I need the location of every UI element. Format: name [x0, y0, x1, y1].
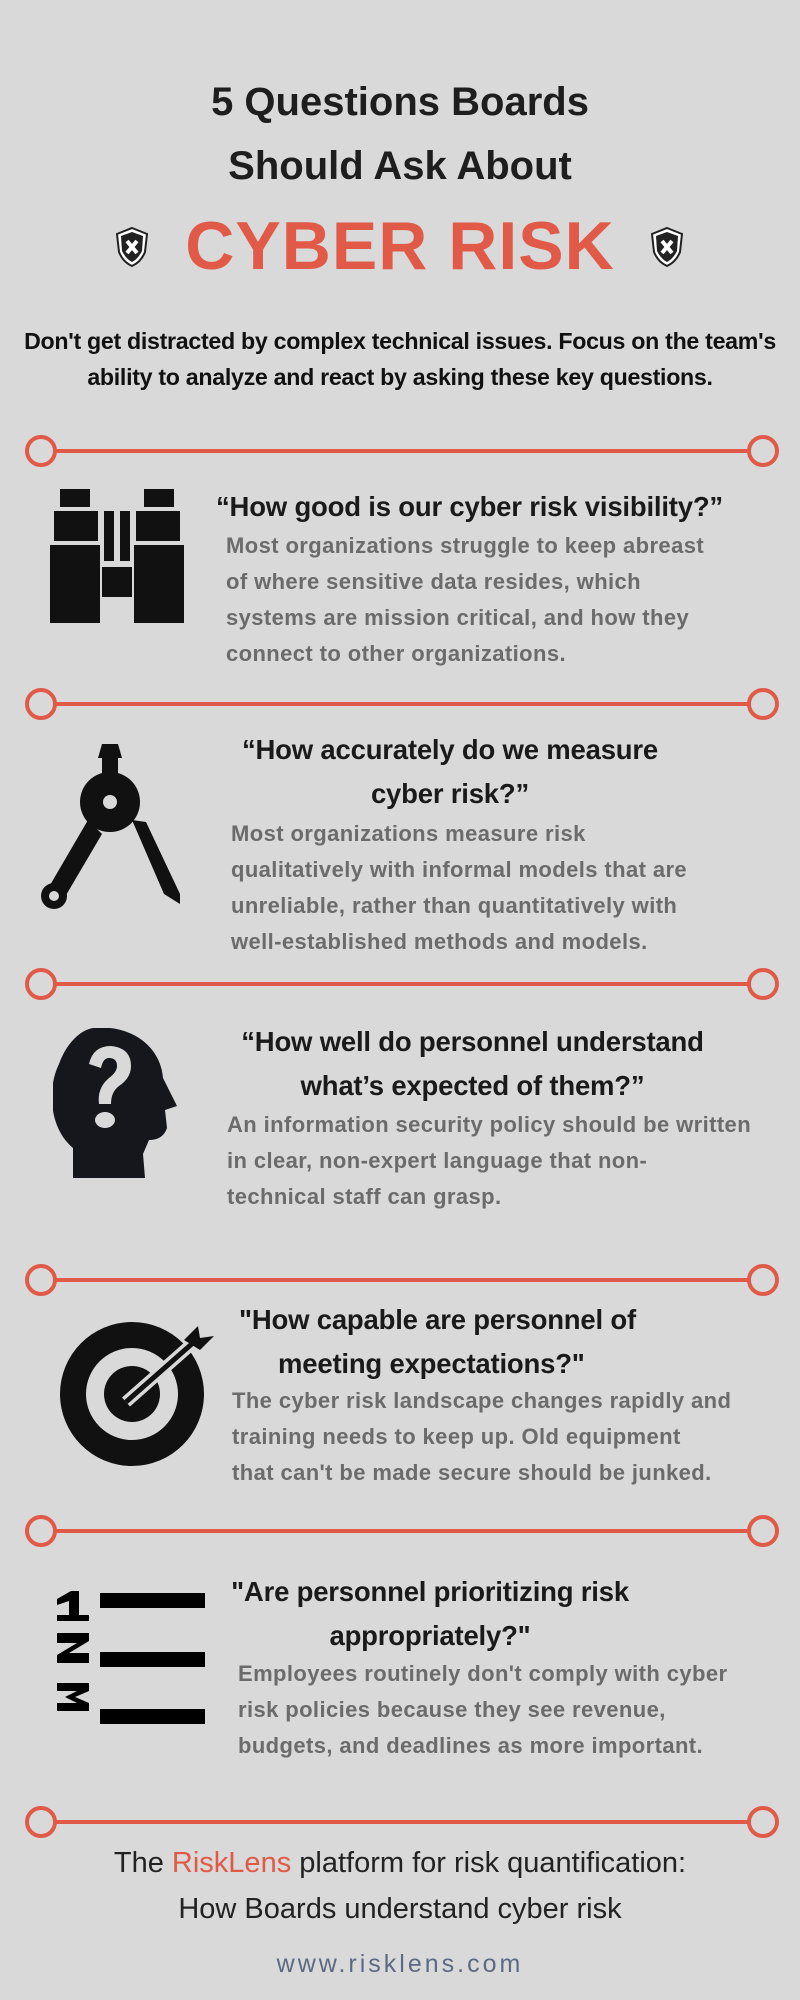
section 4: meeting expectations?": [278, 1348, 585, 1379]
heading 3: [241, 1026, 704, 1101]
heading 5: appropriately?": [329, 1620, 531, 1651]
icon: compass: [41, 744, 180, 909]
title: Should Ask About: [228, 144, 572, 188]
body 3: An information security policy should be written: [227, 1112, 751, 1137]
body 3: [227, 1112, 751, 1209]
heading 1: “How good is our cyber risk visibility?”: [216, 491, 723, 522]
icon: shield left: [116, 226, 148, 268]
body 1: Most organizations struggle to keep abreast: [226, 533, 704, 558]
footer text: How Boards understand cyber risk: [178, 1893, 622, 1925]
footer text: The RiskLens platform for risk quantification:: [114, 1847, 686, 1879]
body 4: [232, 1388, 731, 1485]
subtitle: ability to analyze and react by asking these key questions.: [87, 364, 713, 390]
body 2: [231, 821, 687, 954]
icon: head with question mark: [53, 1028, 177, 1178]
body 5: budgets, and deadlines as more important.: [238, 1733, 703, 1758]
subtitle: [24, 328, 776, 390]
icon: target with arrow: [60, 1322, 214, 1466]
footer text: [114, 1847, 686, 1925]
title: [211, 80, 589, 188]
body 2: qualitatively with informal models that are: [231, 857, 687, 882]
body 4: training needs to keep up. Old equipment: [232, 1424, 681, 1449]
heading 4: "How capable are personnel of: [239, 1304, 636, 1335]
section 1: [50, 489, 723, 666]
heading 2: “How accurately do we measure: [242, 734, 658, 765]
body 4: that can't be made secure should be junked.: [232, 1460, 712, 1485]
body 5: [238, 1661, 727, 1758]
icon: binoculars: [50, 489, 184, 623]
heading 5: "Are personnel prioritizing risk: [231, 1576, 629, 1607]
heading 3: what’s expected of them?”: [301, 1070, 644, 1101]
body 3: technical staff can grasp.: [227, 1184, 502, 1209]
body 4: The cyber risk landscape changes rapidly and: [232, 1388, 731, 1413]
body 2: Most organizations measure risk: [231, 821, 586, 846]
body 1: of where sensitive data resides, which: [226, 569, 641, 594]
title: cyber risk: CYBER RISK: [185, 208, 615, 284]
body 1: systems are mission critical, and how they: [226, 605, 689, 630]
heading 2: [242, 734, 658, 809]
footer url: www.risklens.com: [277, 1950, 523, 1978]
body 3: in clear, non-expert language that non-: [227, 1148, 647, 1173]
section 2: [41, 734, 687, 954]
title: 5 Questions Boards: [211, 80, 589, 124]
heading 2: cyber risk?”: [371, 778, 529, 809]
section 4: [60, 1304, 731, 1485]
body 5: risk policies because they see revenue,: [238, 1697, 666, 1722]
subtitle: Don't get distracted by complex technical issues. Focus on the team's: [24, 328, 776, 354]
icon: numbered list: [57, 1591, 205, 1724]
body 1: connect to other organizations.: [226, 641, 566, 666]
heading 5: [231, 1576, 630, 1651]
section 5: [57, 1576, 727, 1758]
body 2: well-established methods and models.: [231, 929, 648, 954]
body 2: unreliable, rather than quantitatively with: [231, 893, 677, 918]
body 5: Employees routinely don't comply with cyber: [238, 1661, 727, 1686]
body 1: [226, 533, 704, 666]
icon: shield right: [650, 226, 684, 268]
heading 3: “How well do personnel understand: [241, 1026, 704, 1057]
section 3: [53, 1026, 751, 1209]
